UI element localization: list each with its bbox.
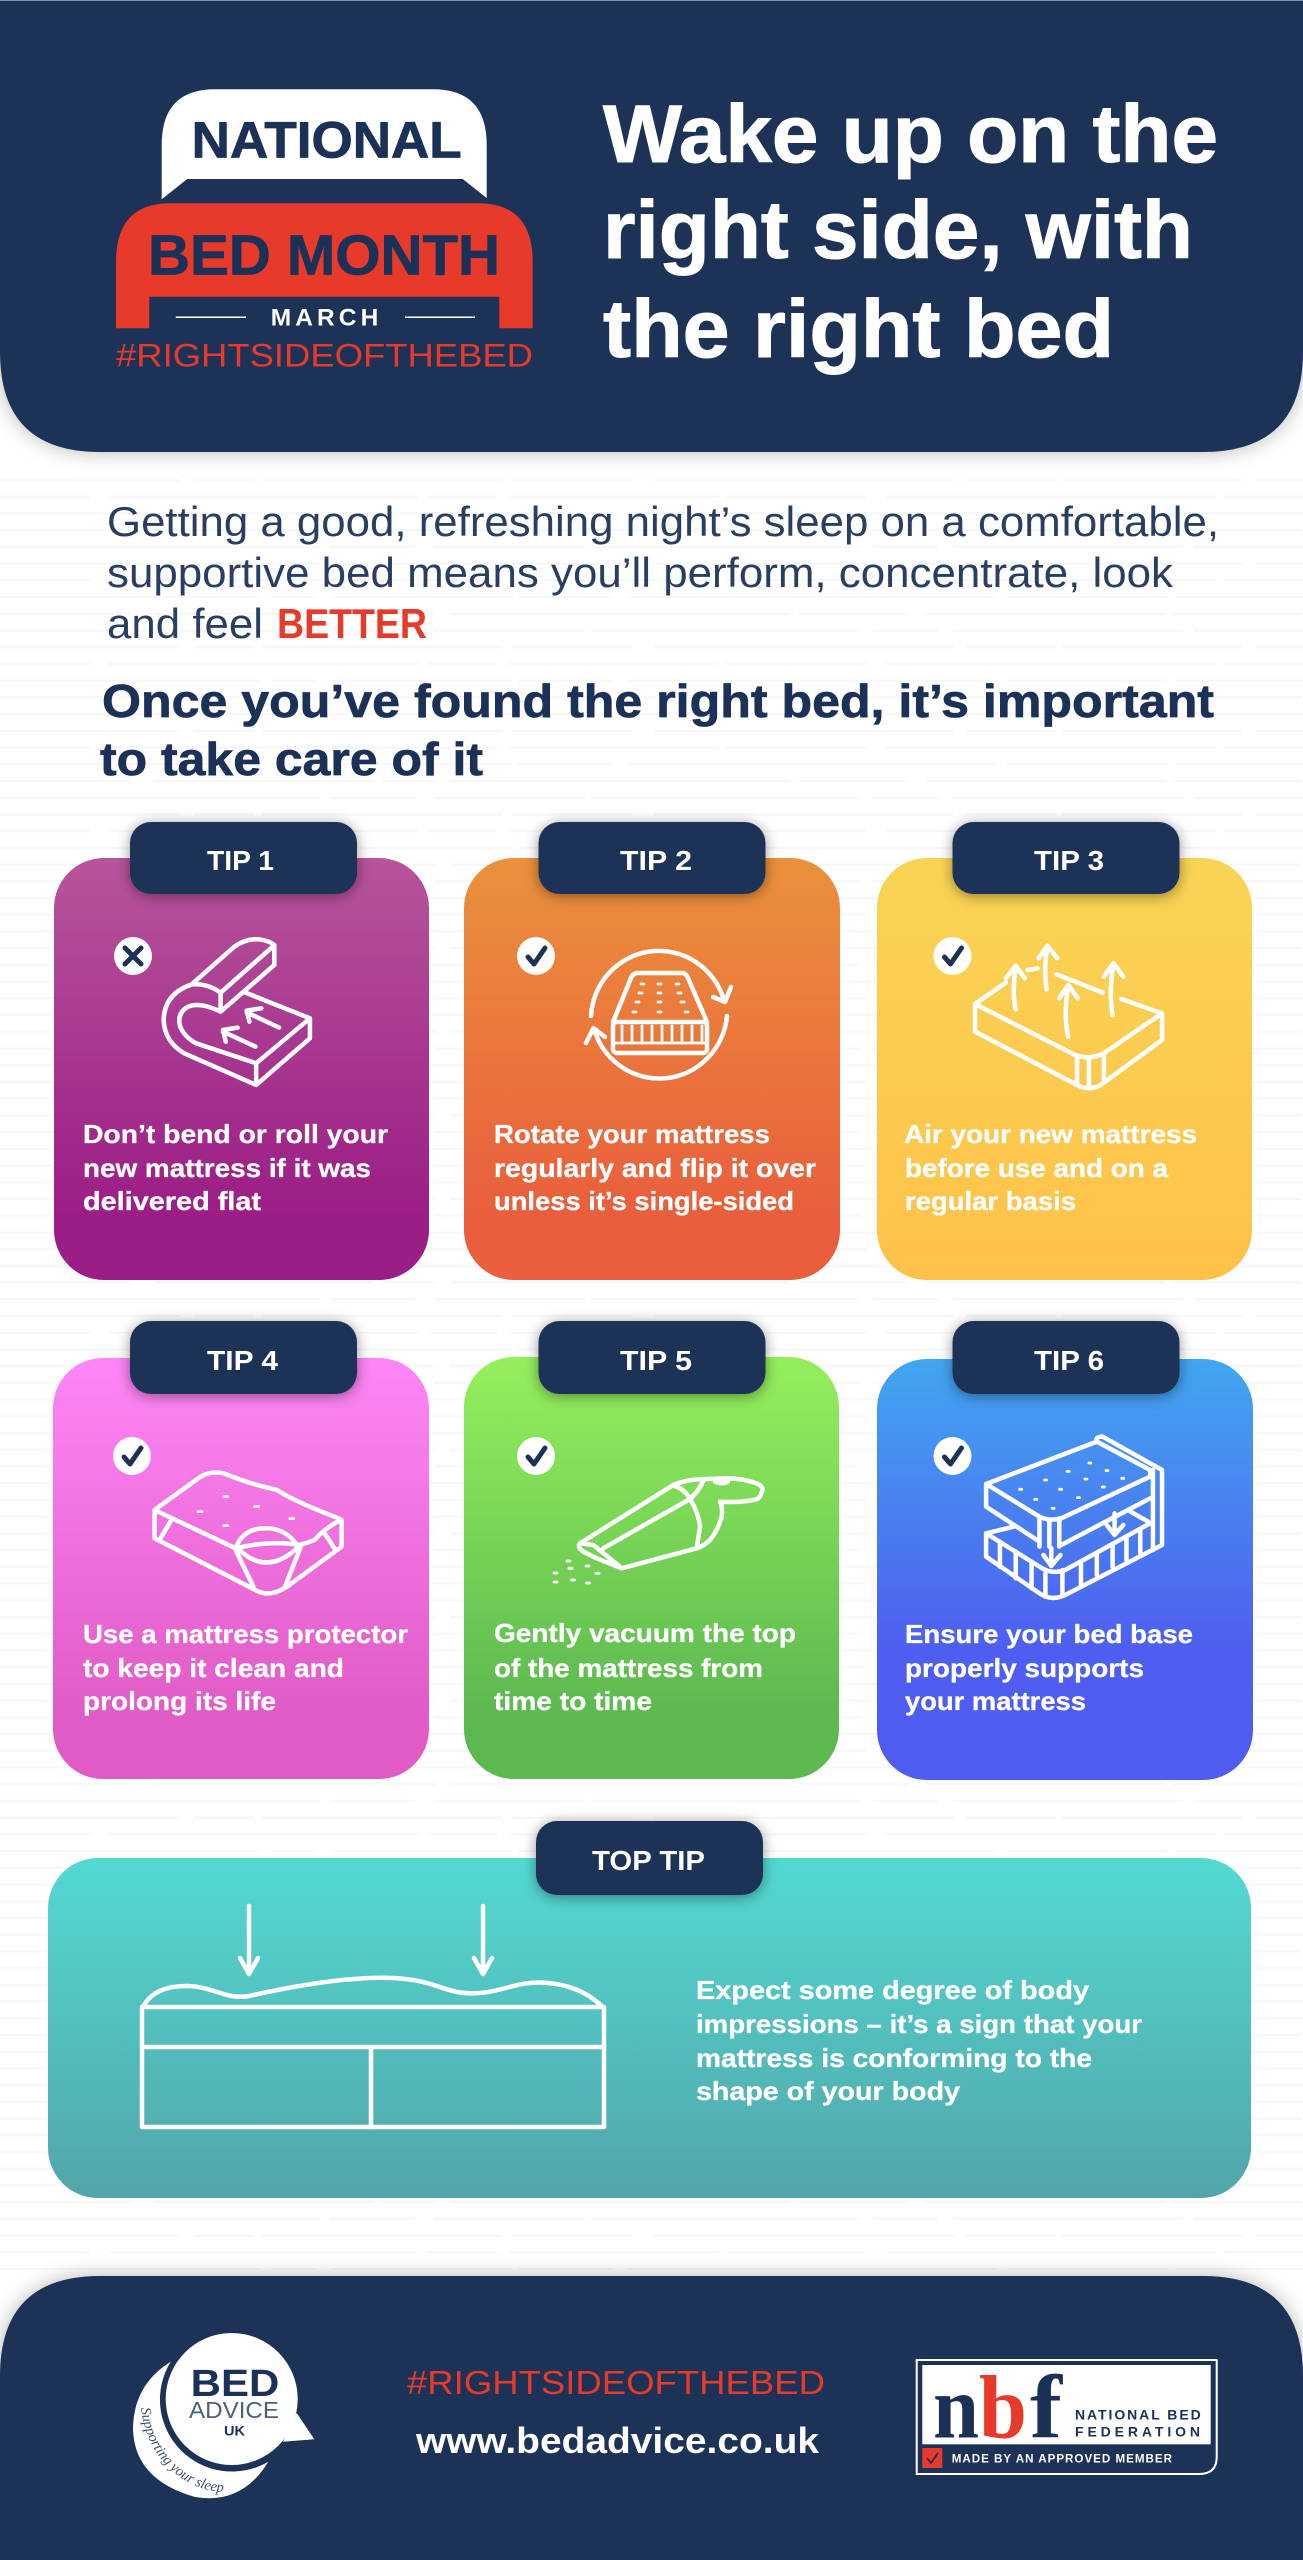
tip 4 text bbox=[83, 1619, 408, 1716]
logo headboard bbox=[162, 89, 487, 199]
top tip text: Expect some degree of body bbox=[696, 1975, 1090, 2005]
icon: mattress on bed base bbox=[986, 1437, 1162, 1598]
logo: National Bed Federation bbox=[917, 2358, 1217, 2474]
tip 5 text: time to time bbox=[494, 1686, 652, 1716]
logo: National Bed Federation: FEDERATION bbox=[1075, 2424, 1200, 2440]
badge: tick bbox=[934, 937, 972, 975]
intro paragraph: BETTER bbox=[277, 600, 427, 647]
tab: TIP 5: TIP 5 bbox=[620, 1345, 692, 1376]
top tip text: mattress is conforming to the bbox=[696, 2043, 1092, 2073]
tip 6 text: your mattress bbox=[905, 1686, 1086, 1716]
top tip text bbox=[696, 1975, 1142, 2106]
website: www.bedadvice.co.uk bbox=[415, 2420, 820, 2461]
tab: TIP 2: TIP 2 bbox=[620, 845, 692, 876]
tip 3 text: Air your new mattress bbox=[904, 1119, 1197, 1149]
logo: National Bed Federation: n bbox=[933, 2358, 979, 2457]
badge: tick bbox=[934, 1437, 972, 1475]
logo: Bed Advice UK: ADVICE bbox=[189, 2397, 279, 2423]
tip 1 text: Don’t bend or roll your bbox=[83, 1119, 388, 1149]
logo: National Bed Federation: MADE BY AN APPROVED MEMBER bbox=[952, 2452, 1173, 2465]
hashtag: #RIGHTSIDEOFTHEBED bbox=[407, 2364, 825, 2401]
logo words: BED MONTH: BED MONTH bbox=[148, 223, 500, 287]
top tip text: shape of your body bbox=[696, 2076, 961, 2106]
main title: Wake up on the bbox=[603, 89, 1218, 180]
logo: Bed Advice UK bbox=[133, 2333, 314, 2498]
tip 6 text bbox=[905, 1619, 1193, 1716]
panel: top tip bbox=[48, 1821, 1251, 2198]
icon: airing mattress bbox=[975, 946, 1162, 1088]
subheading: Once you’ve found the right bed, it’s important bbox=[102, 675, 1214, 727]
tip 2 text: Rotate your mattress bbox=[494, 1119, 770, 1149]
icon: rotating mattress bbox=[586, 951, 731, 1079]
panel: tip 2 bbox=[464, 822, 840, 1280]
logo word: NATIONAL: NATIONAL bbox=[192, 111, 462, 168]
tab: TIP 5 bbox=[538, 1321, 766, 1394]
tab: TIP 1: TIP 1 bbox=[207, 845, 274, 876]
tip 2 text: unless it’s single-sided bbox=[494, 1186, 794, 1216]
tab: TIP 4 bbox=[130, 1321, 357, 1394]
header band bbox=[0, 0, 1303, 452]
logo: Bed Advice UK: Supporting your sleep bbox=[140, 2408, 224, 2495]
panel: tip 1 bbox=[54, 822, 429, 1280]
intro paragraph: supportive bed means you’ll perform, concentrate, look bbox=[107, 549, 1174, 596]
tab: TOP TIP bbox=[536, 1821, 763, 1895]
tab: TOP TIP: TOP TIP bbox=[592, 1845, 705, 1876]
main title bbox=[603, 89, 1218, 375]
logo hashtag: #RIGHTSIDEOFTHEBED bbox=[116, 338, 533, 374]
badge: cross bbox=[114, 937, 152, 975]
tab: TIP 3 bbox=[952, 822, 1180, 894]
logo: National Bed Federation: f bbox=[1030, 2358, 1063, 2457]
tab: TIP 3: TIP 3 bbox=[1034, 845, 1104, 876]
tip 3 text bbox=[904, 1119, 1197, 1216]
tip 1 text: delivered flat bbox=[83, 1186, 261, 1216]
tip 6 text: Ensure your bed base bbox=[905, 1619, 1193, 1649]
tab: TIP 2 bbox=[538, 822, 766, 894]
tip 5 text bbox=[494, 1618, 796, 1716]
main title: the right bed bbox=[603, 284, 1114, 375]
tab: TIP 6 bbox=[952, 1321, 1180, 1394]
icon: bent mattress bbox=[164, 939, 310, 1085]
subheading bbox=[100, 675, 1214, 785]
tip 4 text: Use a mattress protector bbox=[83, 1619, 408, 1649]
icon: mattress protector bbox=[155, 1472, 342, 1593]
badge: tick bbox=[517, 937, 555, 975]
badge: tick bbox=[113, 1437, 151, 1475]
tip 2 text bbox=[494, 1119, 816, 1216]
intro paragraph: Getting a good, refreshing night’s sleep on a comfortable, bbox=[107, 498, 1219, 545]
tip 3 text: regular basis bbox=[905, 1186, 1076, 1216]
panel: tip 4 bbox=[53, 1321, 429, 1779]
tip 1 text: new mattress if it was bbox=[83, 1153, 371, 1183]
tab: TIP 4: TIP 4 bbox=[207, 1345, 278, 1376]
icon: handheld vacuum bbox=[554, 1478, 763, 1583]
speech bubble bbox=[166, 2333, 314, 2465]
tip 1 text bbox=[83, 1119, 388, 1216]
tip 4 text: to keep it clean and bbox=[83, 1653, 344, 1683]
footer band bbox=[0, 2264, 1303, 2560]
intro paragraph: and feel bbox=[107, 600, 263, 647]
tip 5 text: of the mattress from bbox=[494, 1653, 763, 1683]
logo bed frame bbox=[116, 203, 533, 328]
top tip text: impressions – it’s a sign that your bbox=[696, 2009, 1142, 2039]
logo word: MARCH: MARCH bbox=[271, 305, 378, 332]
logo: National Bed Federation: b bbox=[979, 2358, 1027, 2457]
subheading: to take care of it bbox=[100, 733, 483, 785]
logo: National Bed Month bbox=[116, 89, 533, 374]
crescent bbox=[133, 2362, 268, 2498]
tip 5 text: Gently vacuum the top bbox=[494, 1618, 796, 1648]
badge: tick bbox=[517, 1437, 555, 1475]
tab: TIP 1 bbox=[130, 822, 357, 894]
panel: tip 3 bbox=[877, 822, 1252, 1280]
tip 4 text: prolong its life bbox=[83, 1686, 276, 1716]
tip 3 text: before use and on a bbox=[905, 1153, 1169, 1183]
logo: Bed Advice UK: UK bbox=[224, 2423, 245, 2439]
intro paragraph bbox=[107, 498, 1219, 647]
tip 2 text: regularly and flip it over bbox=[494, 1153, 816, 1183]
panel: tip 5 bbox=[464, 1321, 839, 1779]
icon: bed with body impressions bbox=[142, 1906, 604, 2127]
tip 6 text: properly supports bbox=[905, 1653, 1144, 1683]
main title: right side, with bbox=[603, 185, 1193, 276]
tab: TIP 6: TIP 6 bbox=[1034, 1345, 1104, 1376]
logo: Bed Advice UK: BED bbox=[191, 2363, 279, 2405]
logo: National Bed Federation: NATIONAL BED bbox=[1075, 2406, 1201, 2422]
panel: tip 6 bbox=[877, 1321, 1253, 1780]
